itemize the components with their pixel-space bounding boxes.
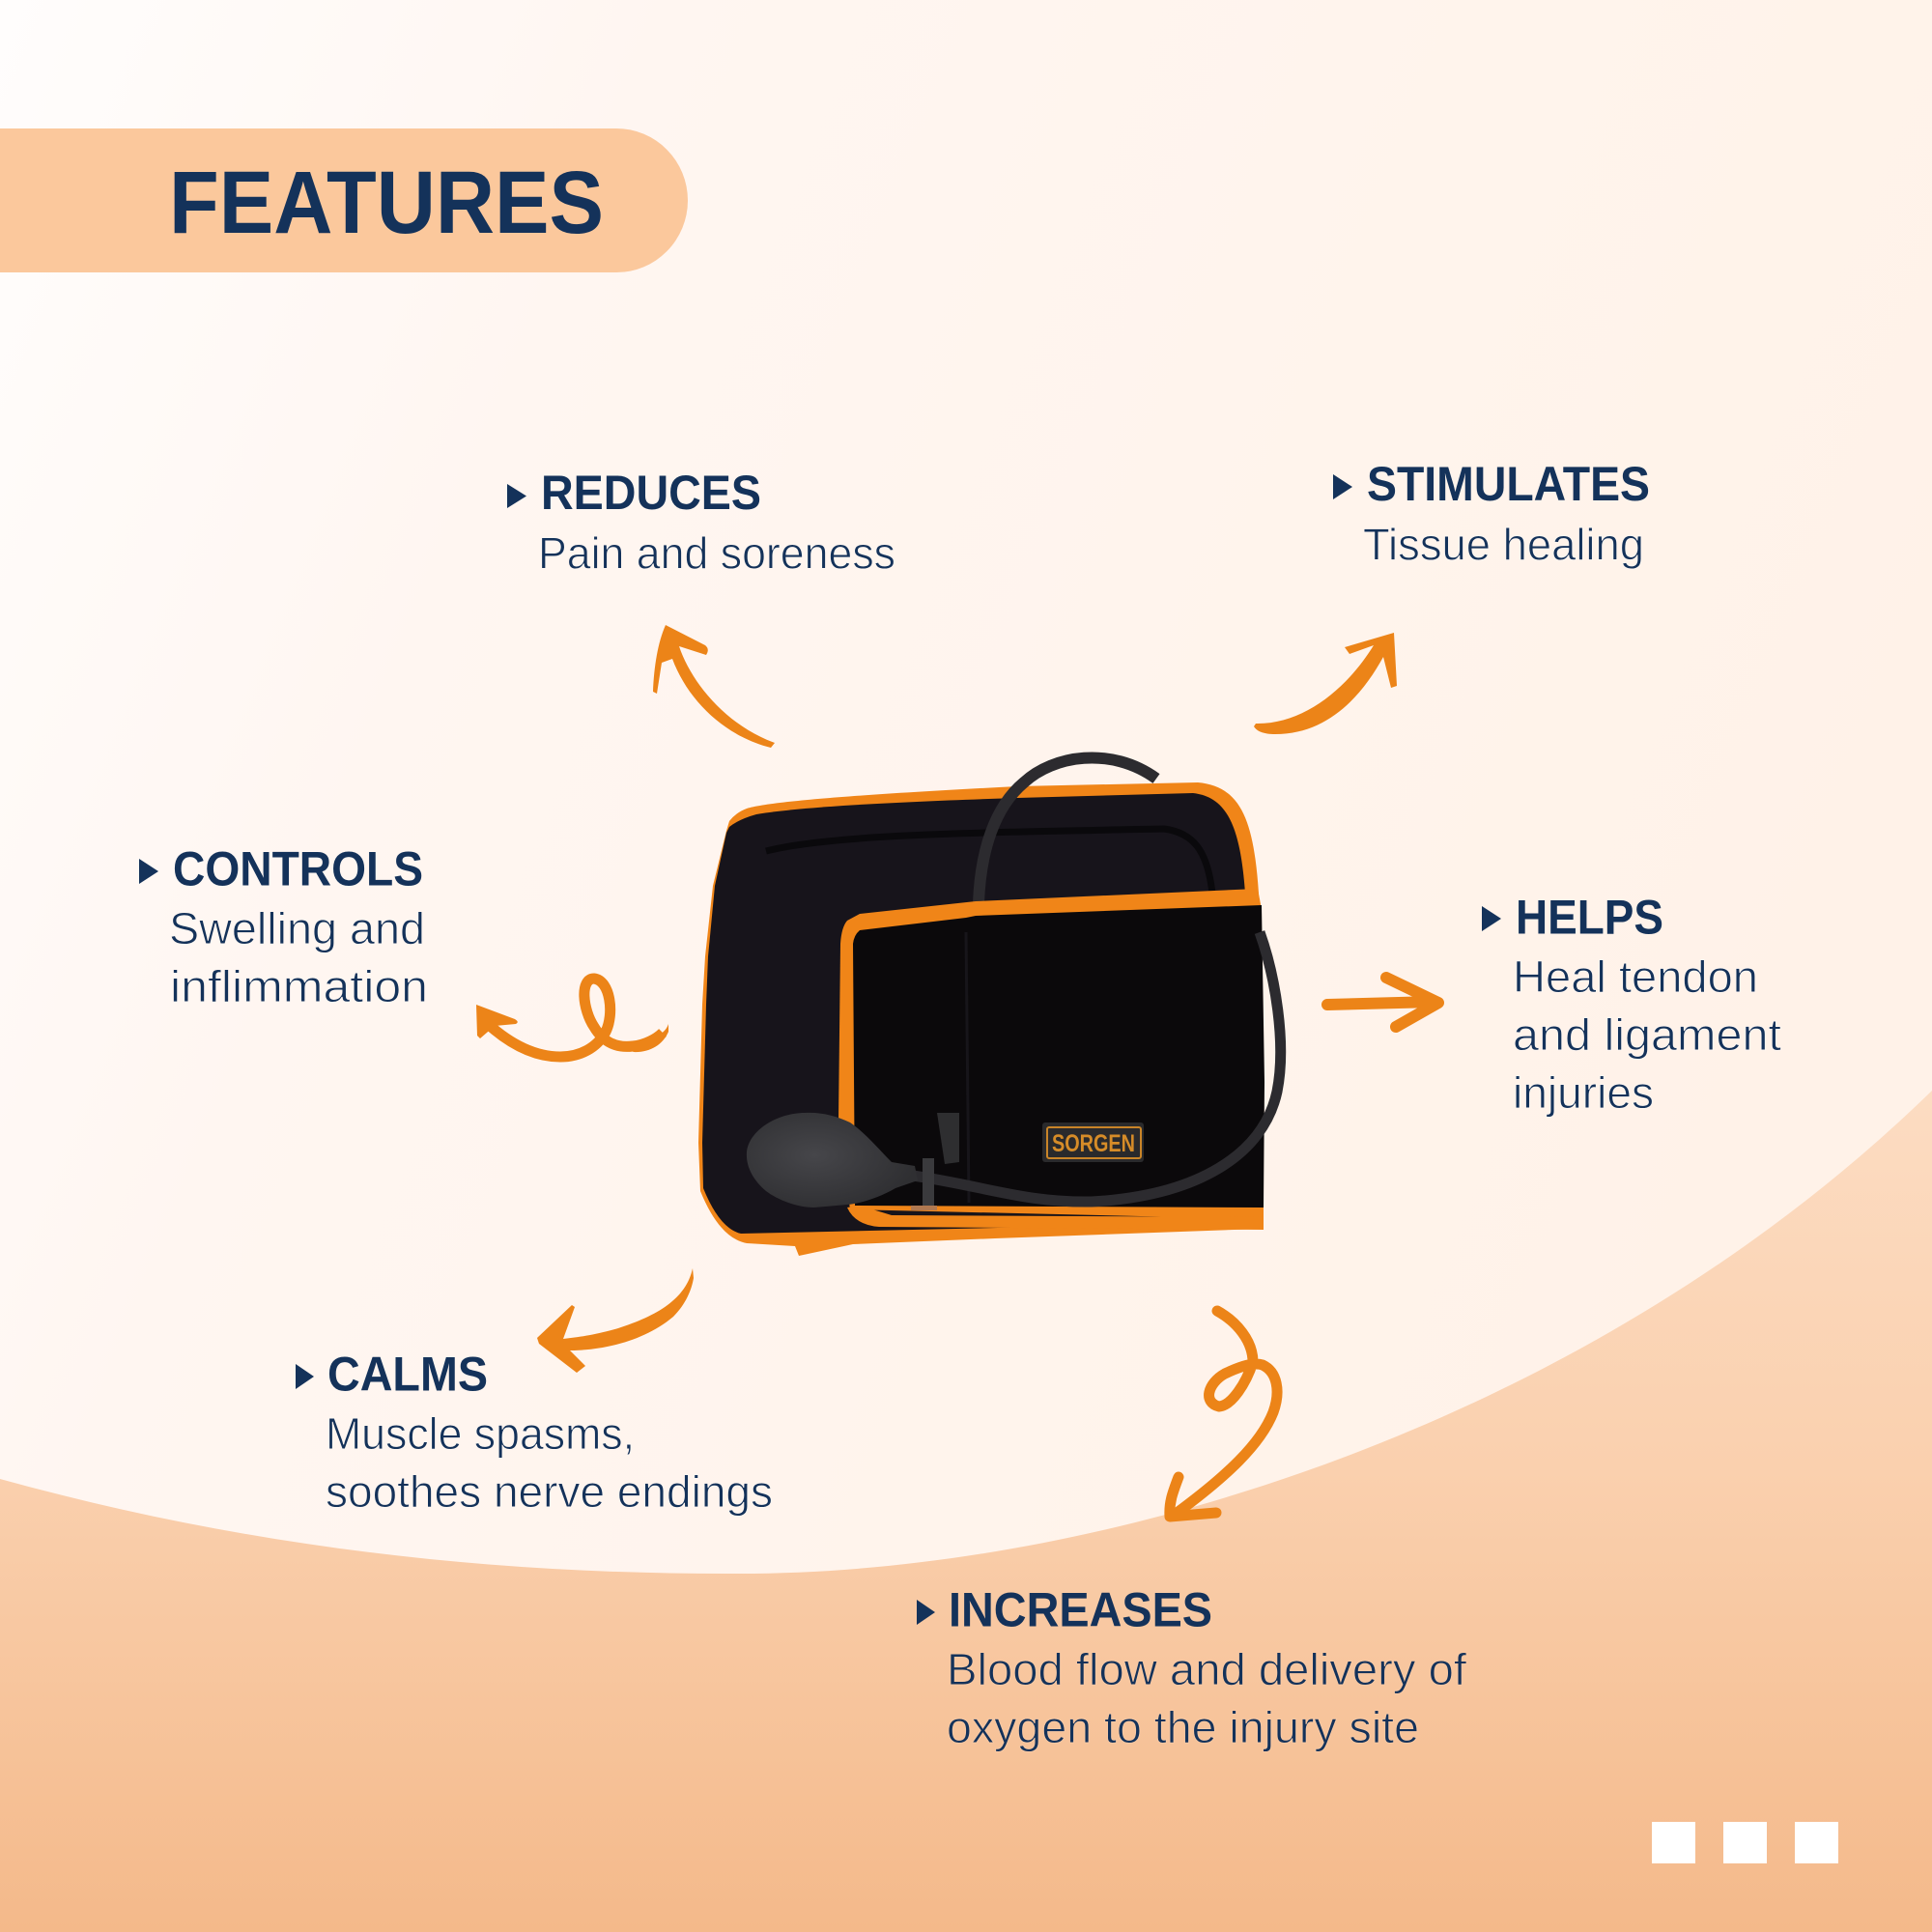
arrow to increases <box>1170 1311 1277 1517</box>
title banner <box>0 128 688 272</box>
feature: controls: inflimmation <box>170 961 428 1011</box>
right tube <box>913 932 1281 1202</box>
back pad <box>698 782 1264 1256</box>
feature: increases: Blood flow and delivery of <box>947 1644 1466 1694</box>
feature: calms <box>296 1347 773 1517</box>
arrow to calms <box>537 1268 694 1373</box>
feature: calms: Muscle spasms, <box>326 1408 635 1459</box>
feature: stimulates: Tissue healing <box>1363 520 1644 570</box>
arrow to reduces <box>653 625 775 748</box>
feature: helps <box>1482 891 1781 1118</box>
logo badge <box>1042 1122 1144 1162</box>
feature: calms: soothes nerve endings <box>326 1466 773 1517</box>
pagination squares <box>1652 1822 1838 1863</box>
feature: stimulates <box>1333 457 1650 570</box>
feature: helps: and ligament <box>1513 1009 1781 1060</box>
feature: increases: oxygen to the injury site <box>947 1702 1419 1752</box>
pump bulb <box>747 1113 918 1208</box>
feature: helps: Heal tendon <box>1513 952 1758 1002</box>
feature: controls: Swelling and <box>169 903 425 953</box>
strap <box>937 1113 959 1164</box>
product: inflatable wrap with pump <box>698 757 1281 1256</box>
feature: controls: CONTROLS <box>173 842 423 896</box>
feature: helps: injuries <box>1513 1067 1654 1118</box>
upper tube <box>979 757 1156 903</box>
arrow to helps <box>1327 978 1438 1027</box>
title banner: FEATURES <box>169 154 604 252</box>
feature: calms: CALMS <box>327 1347 488 1401</box>
logo badge: SORGEN <box>1052 1130 1135 1157</box>
valve <box>911 1158 937 1210</box>
arrow to stimulates <box>1254 633 1397 734</box>
arrow to controls <box>476 979 668 1057</box>
feature: reduces <box>507 466 895 578</box>
feature: helps: HELPS <box>1516 891 1663 945</box>
feature: increases: INCREASES <box>949 1582 1212 1636</box>
feature: increases <box>917 1582 1466 1752</box>
feature: stimulates: STIMULATES <box>1367 457 1650 511</box>
feature: controls <box>139 842 428 1011</box>
peach curved bottom shape <box>0 1091 1932 1932</box>
feature: reduces: REDUCES <box>541 466 761 520</box>
front flap <box>838 889 1264 1219</box>
feature: reduces: Pain and soreness <box>538 527 895 578</box>
